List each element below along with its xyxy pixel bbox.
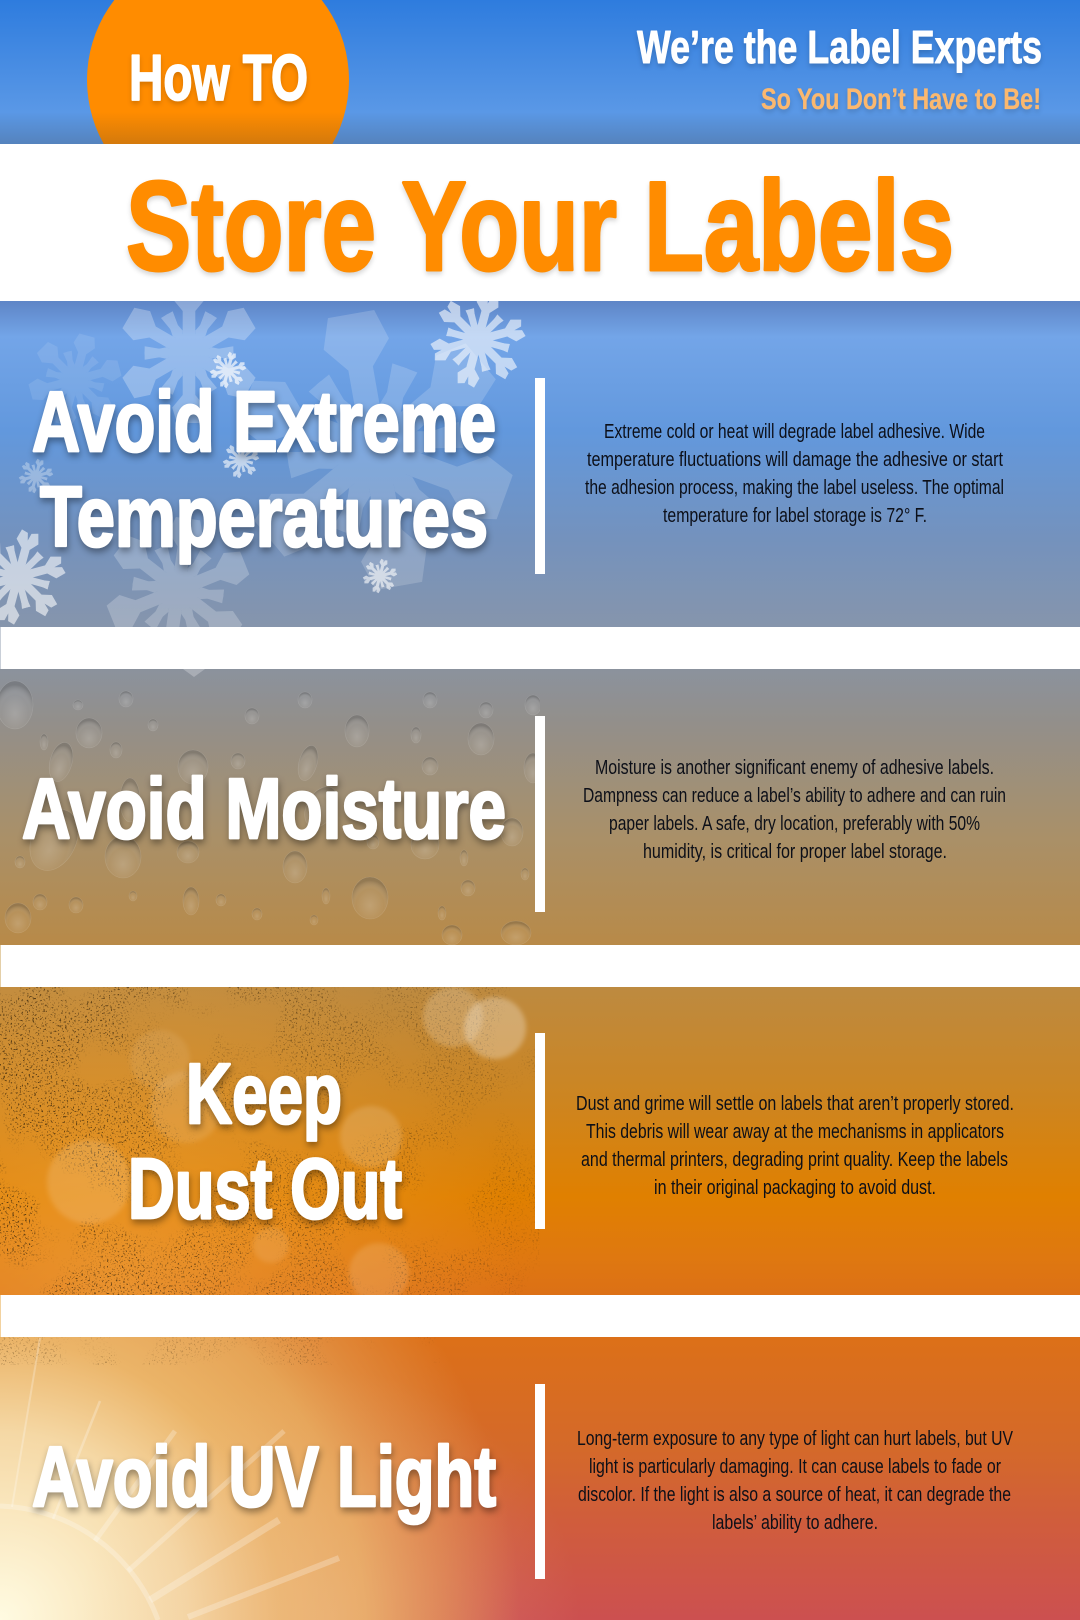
heading [32, 375, 496, 565]
heading: Dust Out [128, 1142, 402, 1237]
title band background [0, 144, 1080, 301]
badge text: How TO [129, 41, 308, 114]
panel: avoid moisture [0, 669, 1080, 945]
body text: in their original packaging to avoid dust. [654, 1177, 936, 1199]
body text: temperature for label storage is 72° F. [663, 505, 927, 527]
panel background [0, 1337, 1080, 1620]
body text: labels’ ability to adhere. [712, 1512, 878, 1534]
dust speckle texture [0, 987, 540, 1295]
white separator [1, 1295, 1080, 1337]
body text: Extreme cold or heat will degrade label adhesive. Wide [604, 421, 985, 443]
snowflake tip overlap [183, 669, 205, 677]
body text [585, 421, 1004, 527]
header background [0, 0, 1080, 144]
heading: Avoid Moisture [22, 762, 506, 857]
panel: avoid uv light [0, 1337, 1080, 1620]
icon: large snowflake [248, 310, 512, 590]
divider bar [535, 716, 545, 912]
body text: paper labels. A safe, dry location, preferably with 50% [609, 813, 980, 835]
header banner [0, 0, 1080, 144]
white separator [1, 945, 1080, 987]
icon: small snowflake [222, 445, 260, 478]
divider bar [535, 378, 545, 574]
icon: small snowflake [19, 459, 53, 493]
panel background [0, 669, 1080, 945]
left edge strip [0, 945, 1, 987]
orange circle badge [87, 0, 349, 144]
heading: Temperatures [40, 470, 488, 565]
icon: faint snowflake [28, 334, 122, 424]
heading [128, 1047, 402, 1237]
icon: large snowflake [122, 301, 256, 423]
left edge strip [0, 1295, 1, 1337]
pale glow lower middle [80, 1370, 580, 1620]
panel: avoid extreme temperatures [0, 301, 1080, 627]
snowflakes [0, 301, 526, 627]
lower left glow [0, 987, 540, 1295]
left edge strip [0, 627, 1, 669]
body text [577, 1428, 1014, 1534]
icon: sun ring and rays [0, 1338, 339, 1620]
residual dust speckle [0, 1337, 440, 1365]
panel: keep dust out [0, 987, 1080, 1303]
icon: bright snowflake [430, 301, 526, 388]
icon: bright snowflake [0, 530, 66, 624]
icon: lower snowflake [106, 517, 250, 627]
bokeh light circles [47, 987, 526, 1303]
divider bar [535, 1033, 545, 1229]
header bottom shadow [0, 112, 1080, 144]
heading: Avoid Extreme [32, 375, 496, 470]
icon: small snowflake [210, 352, 246, 388]
icon: small snowflake [362, 558, 398, 594]
sun glow [0, 1337, 560, 1620]
white separator [1, 627, 1080, 669]
body text [583, 757, 1006, 863]
panel background [0, 301, 1080, 627]
water droplets [0, 681, 542, 945]
panel background [0, 987, 1080, 1295]
body text [576, 1093, 1014, 1199]
body text: humidity, is critical for proper label storage. [643, 841, 947, 863]
heading: Avoid UV Light [32, 1430, 496, 1525]
divider bar [535, 1384, 545, 1579]
heading: Keep [186, 1047, 342, 1142]
title band [0, 144, 1080, 301]
